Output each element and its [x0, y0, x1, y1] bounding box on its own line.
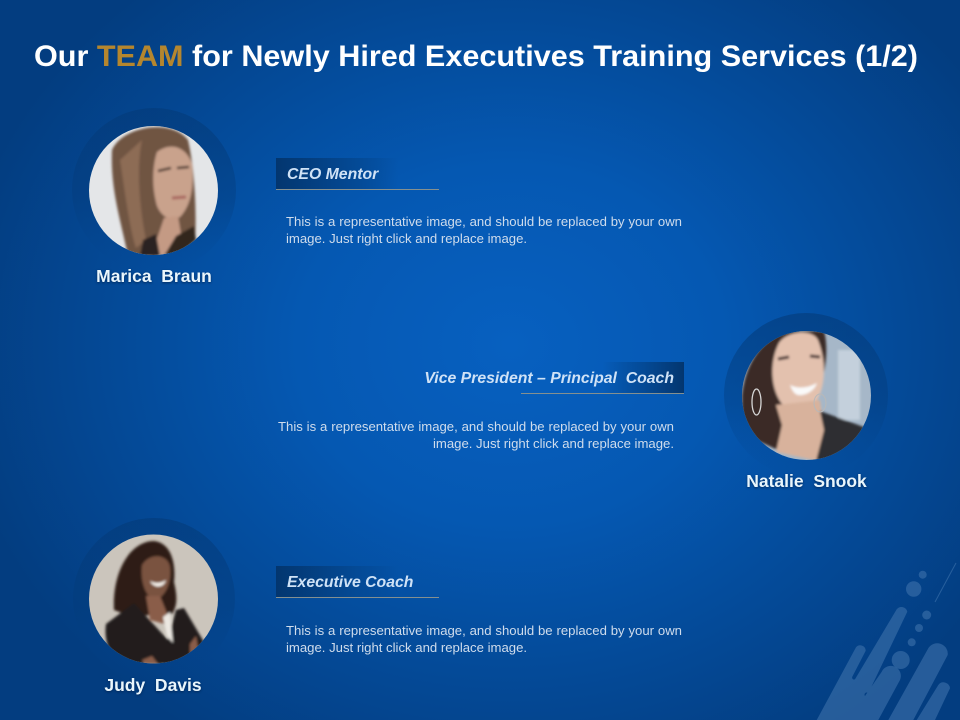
role tag: CEO Mentor [276, 158, 439, 190]
role text: CEO Mentor: CEO Mentor [287, 166, 378, 183]
role text: Executive Coach: Executive Coach [287, 574, 413, 591]
name: Marica Braun: Marica Braun [96, 266, 212, 286]
role tag: Executive Coach [276, 566, 439, 598]
description: CEO Mentor: This is a representative image, and should be replaced by your own [286, 214, 682, 229]
description: Vice President [278, 419, 674, 451]
description: Executive Coach: This is a representative image, and should be replaced by your own [286, 623, 682, 638]
description: Executive Coach [286, 623, 682, 655]
role text: Vice President: Vice President – Principal Coach [424, 370, 674, 387]
description: Vice President: This is a representative image, and should be replaced by your own [278, 419, 674, 434]
description: Executive Coach: image. Just right click and replace image. [286, 640, 527, 655]
role tag: Vice President [521, 362, 684, 394]
description: Vice President: image. Just right click and replace image. [433, 436, 674, 451]
description: CEO Mentor [286, 214, 682, 246]
portrait: Natalie Snook [724, 313, 888, 460]
portrait: Judy Davis [84, 518, 235, 664]
portrait: Marica Braun [75, 108, 236, 255]
name: Natalie Snook: Natalie Snook [746, 471, 867, 491]
title: Our TEAM for Newly Hired Executives Training Services (1/2) [34, 40, 918, 73]
description: CEO Mentor: image. Just right click and replace image. [286, 231, 527, 246]
name: Judy Davis: Judy Davis [104, 675, 202, 695]
